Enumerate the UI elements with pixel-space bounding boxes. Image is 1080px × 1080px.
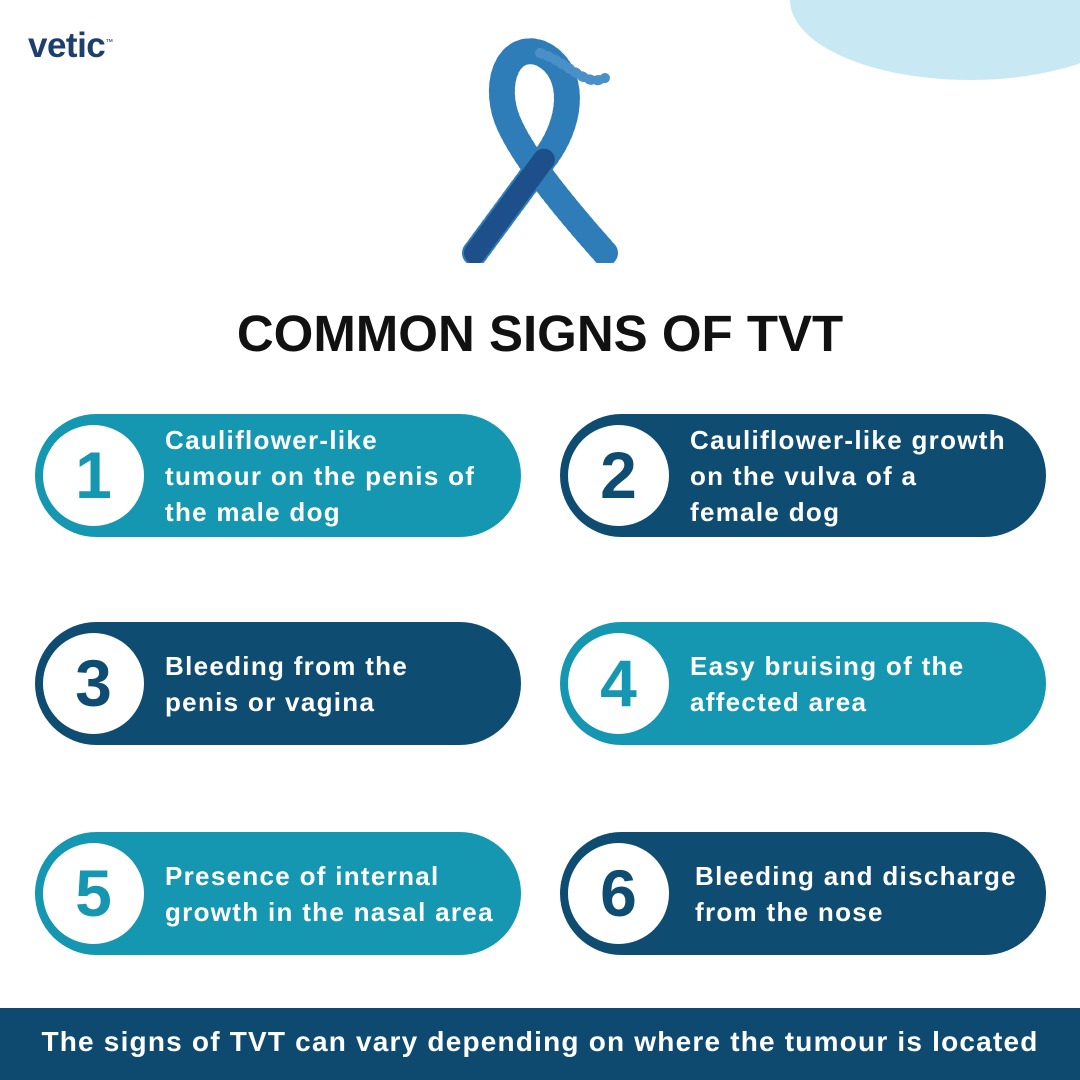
- card 4: 4: [600, 646, 637, 720]
- card 5: 5: [75, 856, 112, 930]
- card 3: [35, 622, 521, 745]
- icon: awareness ribbon: [462, 38, 618, 263]
- card 2: [560, 414, 1046, 537]
- card 2: 2: [600, 438, 637, 512]
- card 2: Cauliflower-like growth: [690, 424, 1006, 454]
- card 1: Cauliflower-like: [165, 424, 378, 454]
- footer: [0, 1008, 1080, 1080]
- card 6: Bleeding and discharge: [695, 860, 1017, 890]
- card 3: Bleeding from the: [165, 650, 408, 680]
- card 1: the male dog: [165, 496, 341, 526]
- card 4: [560, 622, 1046, 745]
- card 5: Presence of internal: [165, 860, 440, 890]
- decorative cloud: [790, 0, 1080, 80]
- title: COMMON SIGNS OF TVT: [237, 305, 843, 362]
- card 6: [560, 832, 1046, 955]
- logo: vetic™: [28, 26, 113, 65]
- card 3: 3: [75, 646, 112, 720]
- footer: The signs of TVT can vary depending on where the tumour is located: [41, 1026, 1039, 1057]
- card 6: 6: [600, 856, 637, 930]
- card 4: affected area: [690, 686, 867, 716]
- card 2: on the vulva of a: [690, 460, 917, 490]
- card 6: from the nose: [695, 896, 884, 926]
- card 3: penis or vagina: [165, 686, 375, 716]
- card 2: female dog: [690, 496, 840, 526]
- card 4: Easy bruising of the: [690, 650, 964, 680]
- card 1: 1: [75, 438, 112, 512]
- card 1: tumour on the penis of: [165, 460, 475, 490]
- card 5: growth in the nasal area: [165, 896, 494, 926]
- card 5: [35, 832, 521, 955]
- card 1: [35, 414, 521, 537]
